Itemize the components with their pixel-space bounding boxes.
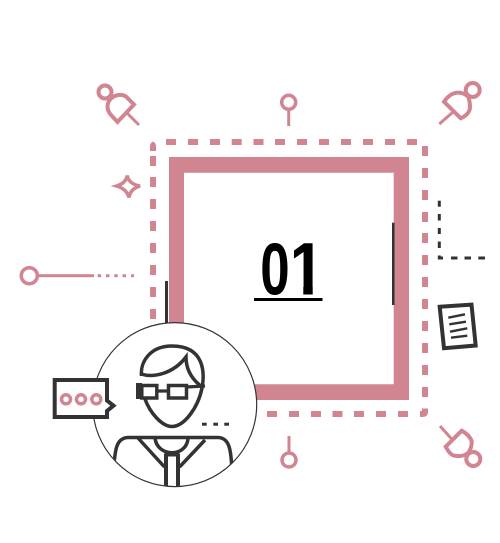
number 01: 1 [288, 227, 325, 310]
dark accent line right [392, 223, 394, 305]
number 01: 0 [260, 228, 290, 310]
dashed pink border [150, 139, 428, 417]
icon: document [440, 305, 476, 348]
icon: head [141, 346, 204, 426]
icon: pin bottom [282, 436, 296, 467]
icon: speech bubble [55, 380, 114, 417]
dots [202, 423, 229, 426]
icon: pin top [282, 95, 296, 126]
icon: plug top right [439, 83, 480, 124]
pink square frame [169, 157, 409, 400]
icon: shoulders and tie [113, 438, 232, 490]
person portrait circle [93, 323, 257, 490]
connector: left pin with dotted line [21, 268, 134, 284]
icon: plug top left [98, 86, 139, 125]
icon: sparkle [116, 176, 140, 198]
icon: plug bottom right [440, 426, 480, 466]
dark accent line left [165, 281, 168, 326]
icon: glasses [136, 383, 205, 399]
connector: dark dashed elbow [438, 201, 485, 260]
number 01 [254, 243, 322, 301]
